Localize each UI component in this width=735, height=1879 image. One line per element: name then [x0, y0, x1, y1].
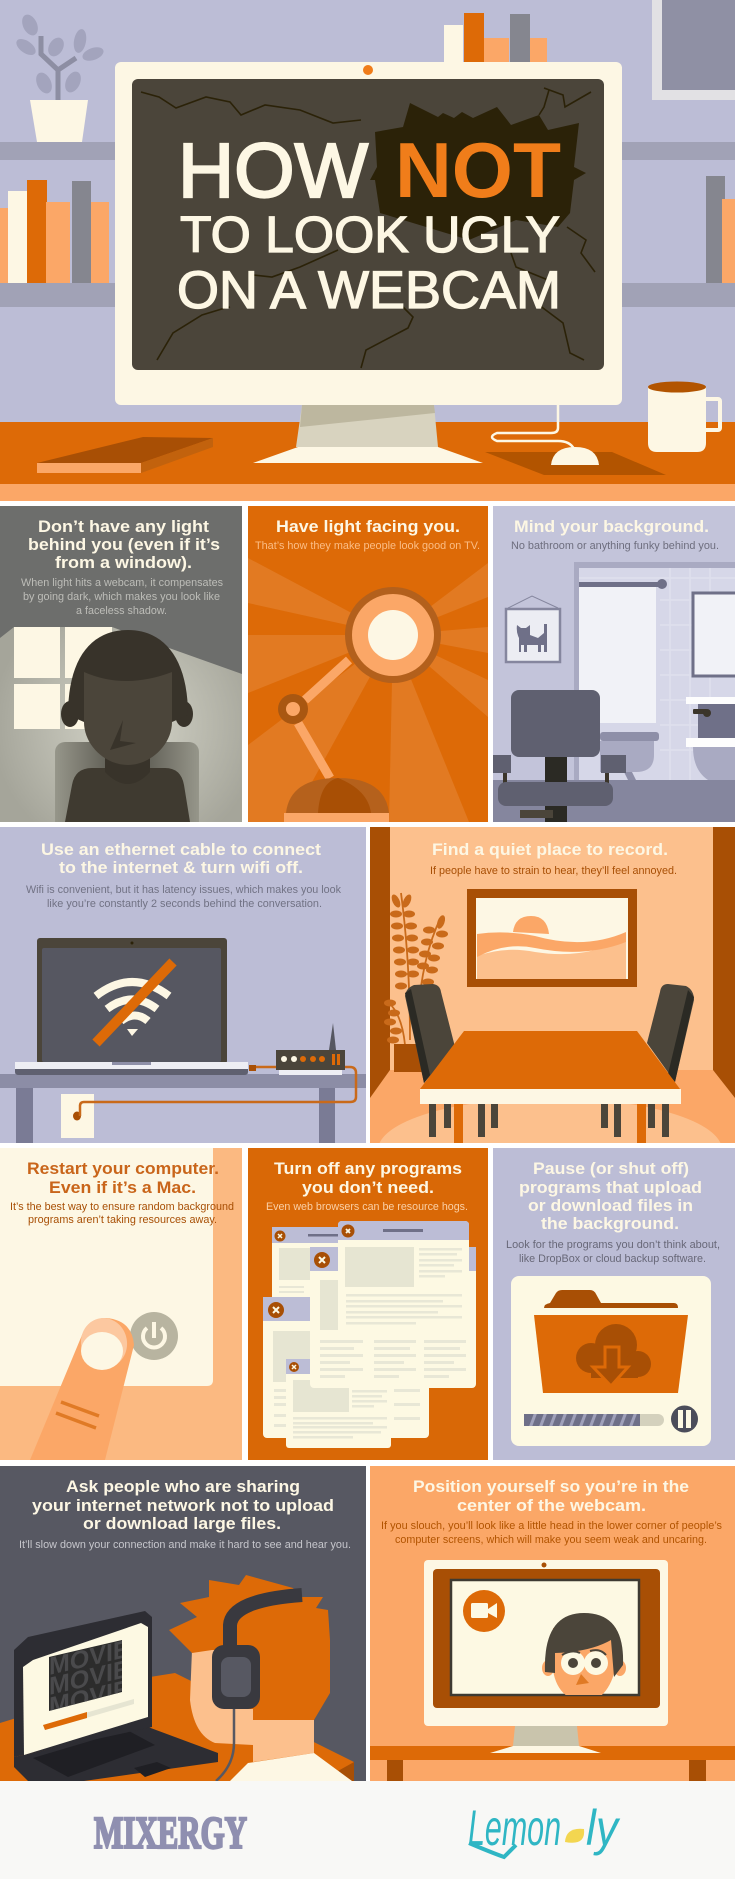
title: HOW: [178, 128, 368, 214]
light rays: [248, 558, 488, 822]
progress bar: [524, 1414, 664, 1426]
footer: [0, 1781, 735, 1879]
bathtub: [600, 732, 659, 780]
desk: [0, 1673, 354, 1781]
heading: center of the webcam.: [457, 1496, 646, 1515]
body text: like DropBox or cloud backup software.: [519, 1253, 706, 1265]
mouse and cable: [492, 405, 599, 465]
broken screen hole: [370, 103, 586, 240]
browser window D: [338, 1221, 469, 1332]
chairs: [405, 984, 694, 1083]
panel: restart your computer: [0, 1148, 242, 1460]
logo: Lemonly: ly: [586, 1800, 621, 1856]
body text: [26, 884, 341, 910]
panel: quiet place: [370, 827, 735, 1143]
heading: programs that upload: [519, 1178, 702, 1197]
heading: to the internet & turn wifi off.: [59, 858, 303, 877]
panel: shared network: [0, 1466, 366, 1781]
bathroom: [493, 562, 735, 822]
heading: Don’t have any light: [38, 517, 209, 536]
ethernet cable line: [80, 1067, 356, 1116]
heading: Even if it’s a Mac.: [49, 1178, 196, 1197]
title: TO LOOK UGLY: [180, 206, 560, 263]
panel: turn off programs: [248, 1148, 488, 1460]
webcam dot: [363, 65, 373, 75]
icon: power button: [130, 1312, 178, 1360]
monitor stand: [490, 1726, 601, 1753]
heading: [274, 1159, 462, 1197]
potted plant: [384, 893, 448, 1072]
framed cat picture: [506, 596, 560, 662]
small face low in screen: [542, 1613, 626, 1698]
monitor stand: [253, 405, 483, 463]
browser window E: [286, 1359, 391, 1448]
right books: [706, 176, 735, 283]
heading: you don’t need.: [302, 1178, 434, 1197]
panel: mind your background: [493, 506, 735, 822]
body text: It’ll slow down your connection and make it hard to see and hear you.: [19, 1539, 351, 1551]
heading: Position yourself so you’re in the: [413, 1477, 689, 1496]
mouse pad: [485, 452, 666, 475]
heading: Turn off any programs: [274, 1159, 462, 1178]
headphones: [212, 1595, 302, 1781]
monitor: [424, 1560, 668, 1726]
monitor: [115, 62, 622, 405]
heading: behind you (even if it’s: [28, 535, 220, 554]
heading: or download files in: [528, 1196, 693, 1215]
movie text: MOVIE: [49, 1635, 130, 1681]
body text: programs aren’t taking resources away.: [28, 1214, 217, 1226]
panel: center of webcam: [370, 1466, 735, 1781]
chair back: [55, 742, 199, 822]
light beam: [0, 627, 242, 822]
table: [0, 1074, 366, 1143]
icon: potted plant: [14, 12, 105, 142]
body text: like you’re constantly 2 seconds behind the conversation.: [47, 898, 322, 910]
heading: [28, 517, 220, 572]
body text: If you slouch, you’ll look like a little head in the lower corner of people’s: [381, 1520, 722, 1532]
icon: video camera: [463, 1590, 505, 1632]
icon: folder with cloud download: [534, 1290, 688, 1393]
heading: Ask people who are sharing: [66, 1477, 300, 1496]
heading: Restart your computer.: [27, 1159, 219, 1178]
shower curtain: [579, 579, 667, 723]
icon: finger: [30, 1314, 134, 1460]
wall outlet: [61, 1094, 94, 1138]
download bar: [43, 1699, 134, 1730]
laptop: [15, 938, 256, 1075]
panel: no light behind you: [0, 506, 242, 832]
floor: [370, 1070, 735, 1143]
icon: wifi crossed out: [96, 962, 173, 1043]
heading: [41, 840, 321, 877]
screen cracks: [141, 88, 595, 368]
heading: Mind your background.: [514, 517, 709, 536]
side walls: [370, 827, 735, 1098]
browser window B: [310, 1247, 476, 1388]
heading: or download large files.: [83, 1514, 281, 1533]
body text: If people have to strain to hear, they’ll feel annoyed.: [430, 865, 677, 877]
icon: pause button: [671, 1406, 698, 1432]
body text: No bathroom or anything funky behind you.: [511, 540, 719, 552]
body text: by going dark, which makes you look like: [23, 591, 220, 603]
heading: [32, 1477, 334, 1533]
body text: a faceless shadow.: [76, 605, 167, 617]
body text: Even web browsers can be resource hogs.: [266, 1201, 468, 1213]
body text: It’s the best way to ensure random background: [10, 1201, 234, 1213]
window: [14, 627, 112, 729]
body text: [381, 1520, 722, 1546]
panel: hero desk scene: [0, 0, 735, 501]
panel: ethernet cable: [0, 827, 366, 1143]
left books: [0, 180, 109, 283]
framed landscape picture: [467, 889, 637, 987]
panel: have light facing you: [248, 506, 488, 822]
toilet: [686, 697, 735, 780]
heading: Find a quiet place to record.: [432, 840, 668, 859]
body text: [21, 577, 223, 617]
body text: Wifi is convenient, but it has latency issues, which makes you look: [26, 884, 341, 896]
heading: your internet network not to upload: [32, 1496, 334, 1515]
heading: [413, 1477, 689, 1515]
download card: [511, 1276, 711, 1446]
logo: Mixergy: MIXERGY: [94, 1808, 247, 1858]
logo: Lemonly: Lemon: [468, 1800, 561, 1856]
cream screen: [0, 1148, 213, 1386]
heading: Use an ethernet cable to connect: [41, 840, 321, 859]
body text: When light hits a webcam, it compensates: [21, 577, 223, 589]
heading: [27, 1159, 219, 1197]
title: NOT: [395, 126, 561, 214]
icon: desk lamp: [278, 587, 441, 822]
left shelves: [0, 142, 115, 307]
panel: pause uploads: [493, 1148, 735, 1460]
right shelves: [622, 142, 735, 307]
body text: Look for the programs you don’t think about,: [506, 1239, 720, 1251]
body text: [506, 1239, 720, 1265]
book on desk: [37, 437, 213, 473]
movie text: MOVIE: [49, 1675, 130, 1721]
router: [276, 1023, 345, 1075]
conference table: [420, 1031, 681, 1143]
title: ON A WEBCAM: [177, 261, 561, 320]
heading: Have light facing you.: [276, 517, 460, 536]
mirror: [693, 593, 735, 676]
heading: [519, 1159, 702, 1233]
table: [370, 1746, 735, 1781]
body text: computer screens, which will make you seem weak and uncaring.: [395, 1534, 707, 1546]
browser window A: [272, 1227, 340, 1302]
laptop with movie: [14, 1611, 218, 1781]
heading: the background.: [541, 1214, 679, 1233]
office chair: [493, 690, 626, 822]
movie text: [50, 1641, 122, 1711]
browser window C: [263, 1297, 429, 1438]
coffee mug: [648, 382, 720, 452]
heading: from a window).: [55, 553, 192, 572]
movie text: MOVIE: [49, 1655, 130, 1701]
top books: [444, 13, 547, 62]
silhouette person: [61, 630, 193, 822]
desk: [0, 422, 735, 501]
heading: Pause (or shut off): [533, 1159, 689, 1178]
person from behind: [169, 1575, 352, 1781]
wall picture frame: [652, 0, 735, 100]
title: [177, 126, 561, 320]
body text: [10, 1201, 234, 1226]
body text: That’s how they make people look good on TV.: [255, 540, 480, 552]
